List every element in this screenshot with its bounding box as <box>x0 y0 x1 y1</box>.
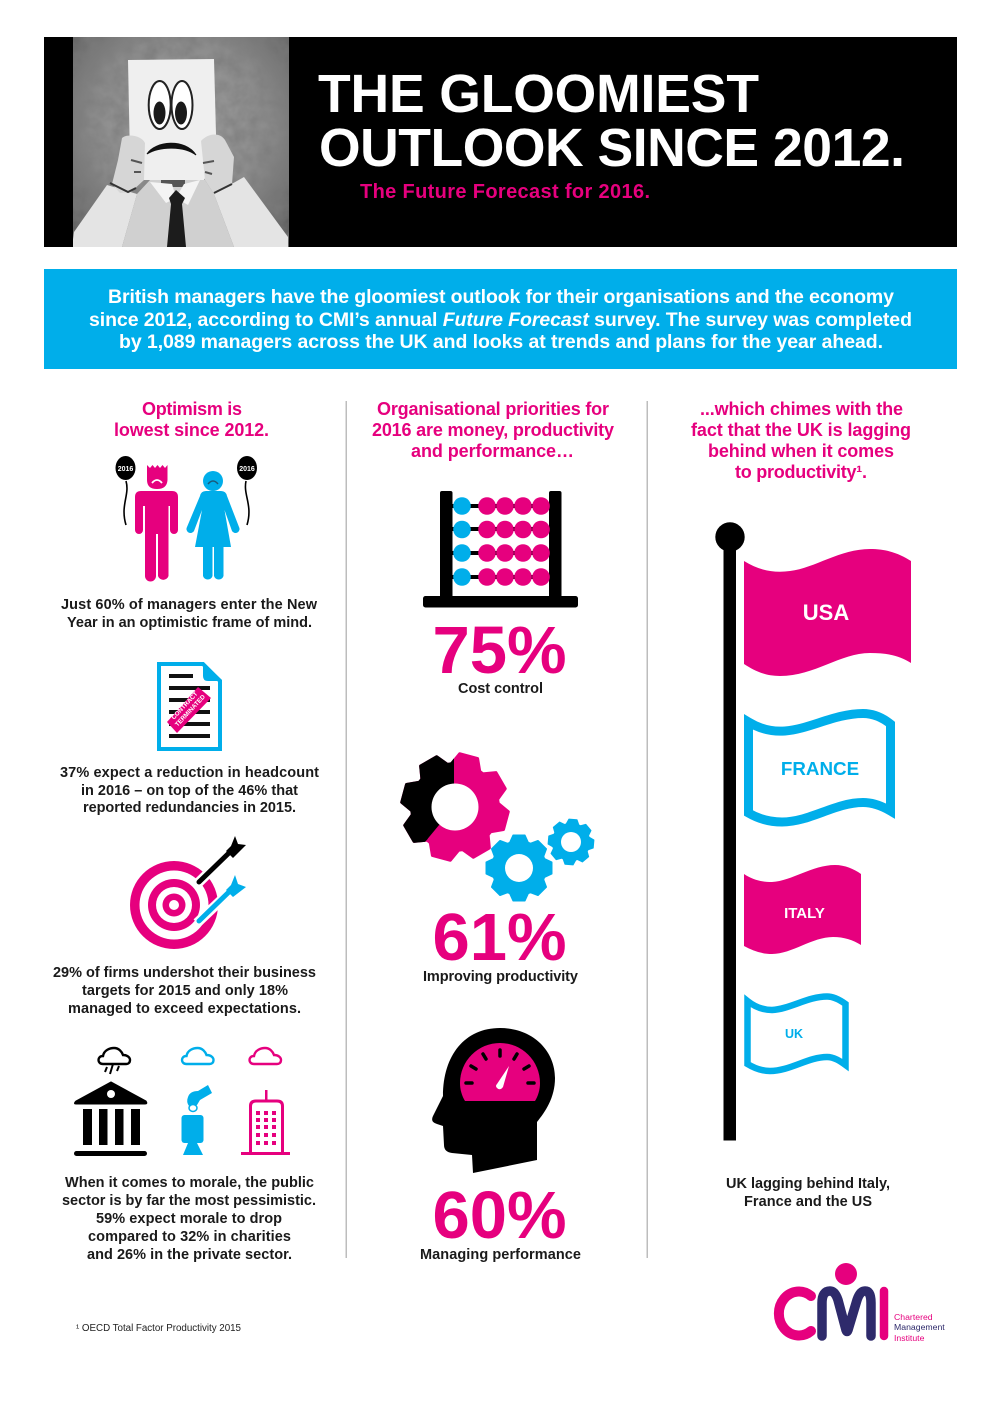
flag: France <box>748 714 890 822</box>
flag: UK <box>748 996 846 1071</box>
text: 60% optimistic: Year in an optimistic frame of mind. <box>67 615 312 631</box>
icon: sad man and woman with balloons <box>116 456 257 582</box>
footnote: ¹ OECD Total Factor Productivity 2015 <box>76 1323 242 1334</box>
text: headcount: in 2016 – on top of the 46% that <box>81 783 298 799</box>
icon: public sector bank under rain cloud <box>74 1048 147 1156</box>
logo: CMI: Chartered <box>894 1312 933 1322</box>
flag: Italy: ITALY <box>784 905 825 922</box>
icon: sad man and woman with balloons: 2016 <box>239 466 255 473</box>
stat: 61%: 61% <box>432 900 567 975</box>
flag: UK: UK <box>785 1027 803 1041</box>
stat: 75%: 75% <box>432 613 567 688</box>
title <box>318 65 905 178</box>
intro band <box>44 269 957 369</box>
icon: flag pole <box>715 522 745 1140</box>
icon: gears <box>400 752 594 902</box>
text: morale <box>62 1175 316 1263</box>
heading: productivity <box>691 399 911 482</box>
text: UK lagging: UK lagging behind Italy, <box>726 1176 890 1192</box>
text: morale: 59% expect morale to drop <box>96 1211 282 1227</box>
text: targets: targets for 2015 and only 18% <box>82 983 288 999</box>
text: 60% optimistic <box>61 597 318 631</box>
intro text <box>89 286 912 353</box>
flag: USA: USA <box>803 600 849 625</box>
panel: right column <box>691 399 911 1210</box>
heading: optimism: lowest since 2012. <box>114 420 269 440</box>
flag: Italy <box>744 865 861 954</box>
text: targets <box>53 965 316 1017</box>
text: 60% optimistic: Just 60% of managers enter the New <box>61 597 318 613</box>
logo: CMI: Institute <box>894 1333 925 1343</box>
heading: productivity: to productivity¹. <box>735 462 867 482</box>
intro text: by 1,089 managers across the UK and looks at trends and plans for the year ahead. <box>119 331 883 353</box>
heading: productivity: fact that the UK is lagging <box>691 420 911 440</box>
text: headcount: 37% expect a reduction in headcount <box>60 765 319 781</box>
heading: optimism: Optimism is <box>142 399 242 419</box>
text: targets: 29% of firms undershot their business <box>53 965 316 981</box>
icon: sad man and woman with balloons: 2016 <box>118 466 133 473</box>
heading: priorities <box>372 399 614 461</box>
icon: charity donation jar <box>182 1048 214 1155</box>
label: cost control: Cost control <box>458 681 543 697</box>
panel: middle column <box>372 399 614 1263</box>
logo: CMI: Management <box>894 1322 945 1332</box>
icon: abacus <box>423 491 578 608</box>
text: headcount: reported redundancies in 2015. <box>83 800 296 816</box>
flag: France: FRANCE <box>781 758 859 779</box>
text: headcount <box>60 765 319 816</box>
title: THE GLOOMIEST <box>318 65 759 124</box>
panel: left column <box>53 399 319 1263</box>
icon: contract terminated document <box>159 662 222 749</box>
heading: priorities: and performance… <box>411 441 574 461</box>
icon: head with gauge <box>432 1028 555 1173</box>
stat: 60%: 60% <box>432 1178 567 1253</box>
header banner <box>44 37 957 247</box>
subtitle: The Future Forecast for 2016. <box>360 181 650 203</box>
flag: USA <box>744 549 911 676</box>
icon: contract terminated document: TERMINATED <box>174 693 207 728</box>
text: morale: and 26% in the private sector. <box>87 1247 292 1263</box>
label: managing performance: Managing performance <box>420 1247 581 1263</box>
intro text: British managers have the gloomiest outlook for their organisations and the economy <box>108 286 894 308</box>
heading: priorities: Organisational priorities for <box>377 399 609 419</box>
heading: priorities: 2016 are money, productivity <box>372 420 614 440</box>
heading: optimism <box>114 399 269 440</box>
text: morale: compared to 32% in charities <box>88 1229 291 1245</box>
icon: contract terminated document: CONTRACT <box>170 691 200 721</box>
icon: target with arrows <box>130 836 246 949</box>
icon: private sector office building <box>241 1048 290 1155</box>
logo: CMI <box>779 1263 945 1343</box>
photo: man holding sad face sign <box>72 37 289 247</box>
text: morale: sector is by far the most pessimistic. <box>62 1193 316 1209</box>
intro text: since 2012, according to CMI’s annual Future Forecast survey. The survey was completed <box>89 309 912 331</box>
text: morale: When it comes to morale, the public <box>65 1175 314 1191</box>
heading: productivity: behind when it comes <box>708 441 894 461</box>
title: OUTLOOK SINCE 2012. <box>319 119 905 178</box>
text: UK lagging: France and the US <box>744 1194 872 1210</box>
heading: productivity: ...which chimes with the <box>700 399 903 419</box>
text: targets: managed to exceed expectations. <box>68 1001 301 1017</box>
label: improving productivity: Improving productivity <box>423 969 578 985</box>
text: UK lagging <box>726 1176 890 1210</box>
